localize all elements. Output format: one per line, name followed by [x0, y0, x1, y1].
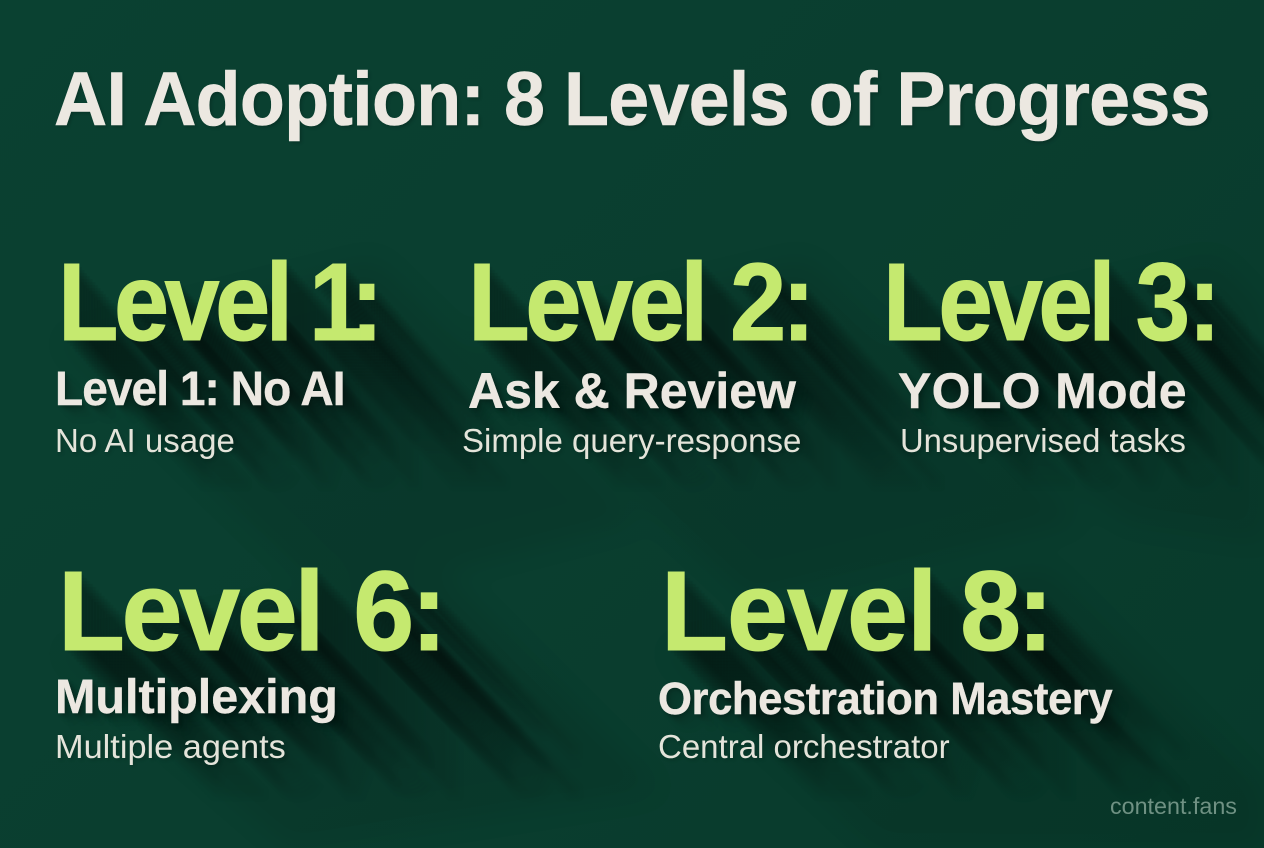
level 1 number: Level 1:: [58, 241, 379, 364]
panel: level 6: [55, 548, 547, 776]
level 8 heading: Orchestration Mastery: [658, 673, 1112, 724]
level 2 description: Simple query-response: [462, 422, 801, 459]
level 1 description: No AI usage: [55, 422, 235, 459]
level 2 heading: Ask & Review: [468, 363, 796, 419]
title: AI Adoption: 8 Levels of Progress: [54, 57, 1210, 142]
level 3 description: Unsupervised tasks: [900, 422, 1186, 459]
level 3 heading: YOLO Mode: [898, 363, 1187, 419]
level 3 number: Level 3:: [883, 241, 1216, 364]
level 6 number: Level 6:: [58, 548, 444, 674]
level 1 heading: Level 1: No AI: [55, 363, 345, 416]
panel: level 2: [462, 241, 903, 466]
panel: level 8: [658, 548, 1152, 776]
level 2 number: Level 2:: [468, 241, 811, 364]
panel: level 1: [55, 241, 474, 467]
level 6 heading: Multiplexing: [55, 670, 338, 724]
panel: level 3: [883, 241, 1264, 466]
level 8 number: Level 8:: [661, 548, 1053, 674]
level 6 description: Multiple agents: [55, 728, 286, 765]
level 8 description: Central orchestrator: [658, 728, 950, 765]
watermark: content.fans: [1110, 793, 1237, 819]
